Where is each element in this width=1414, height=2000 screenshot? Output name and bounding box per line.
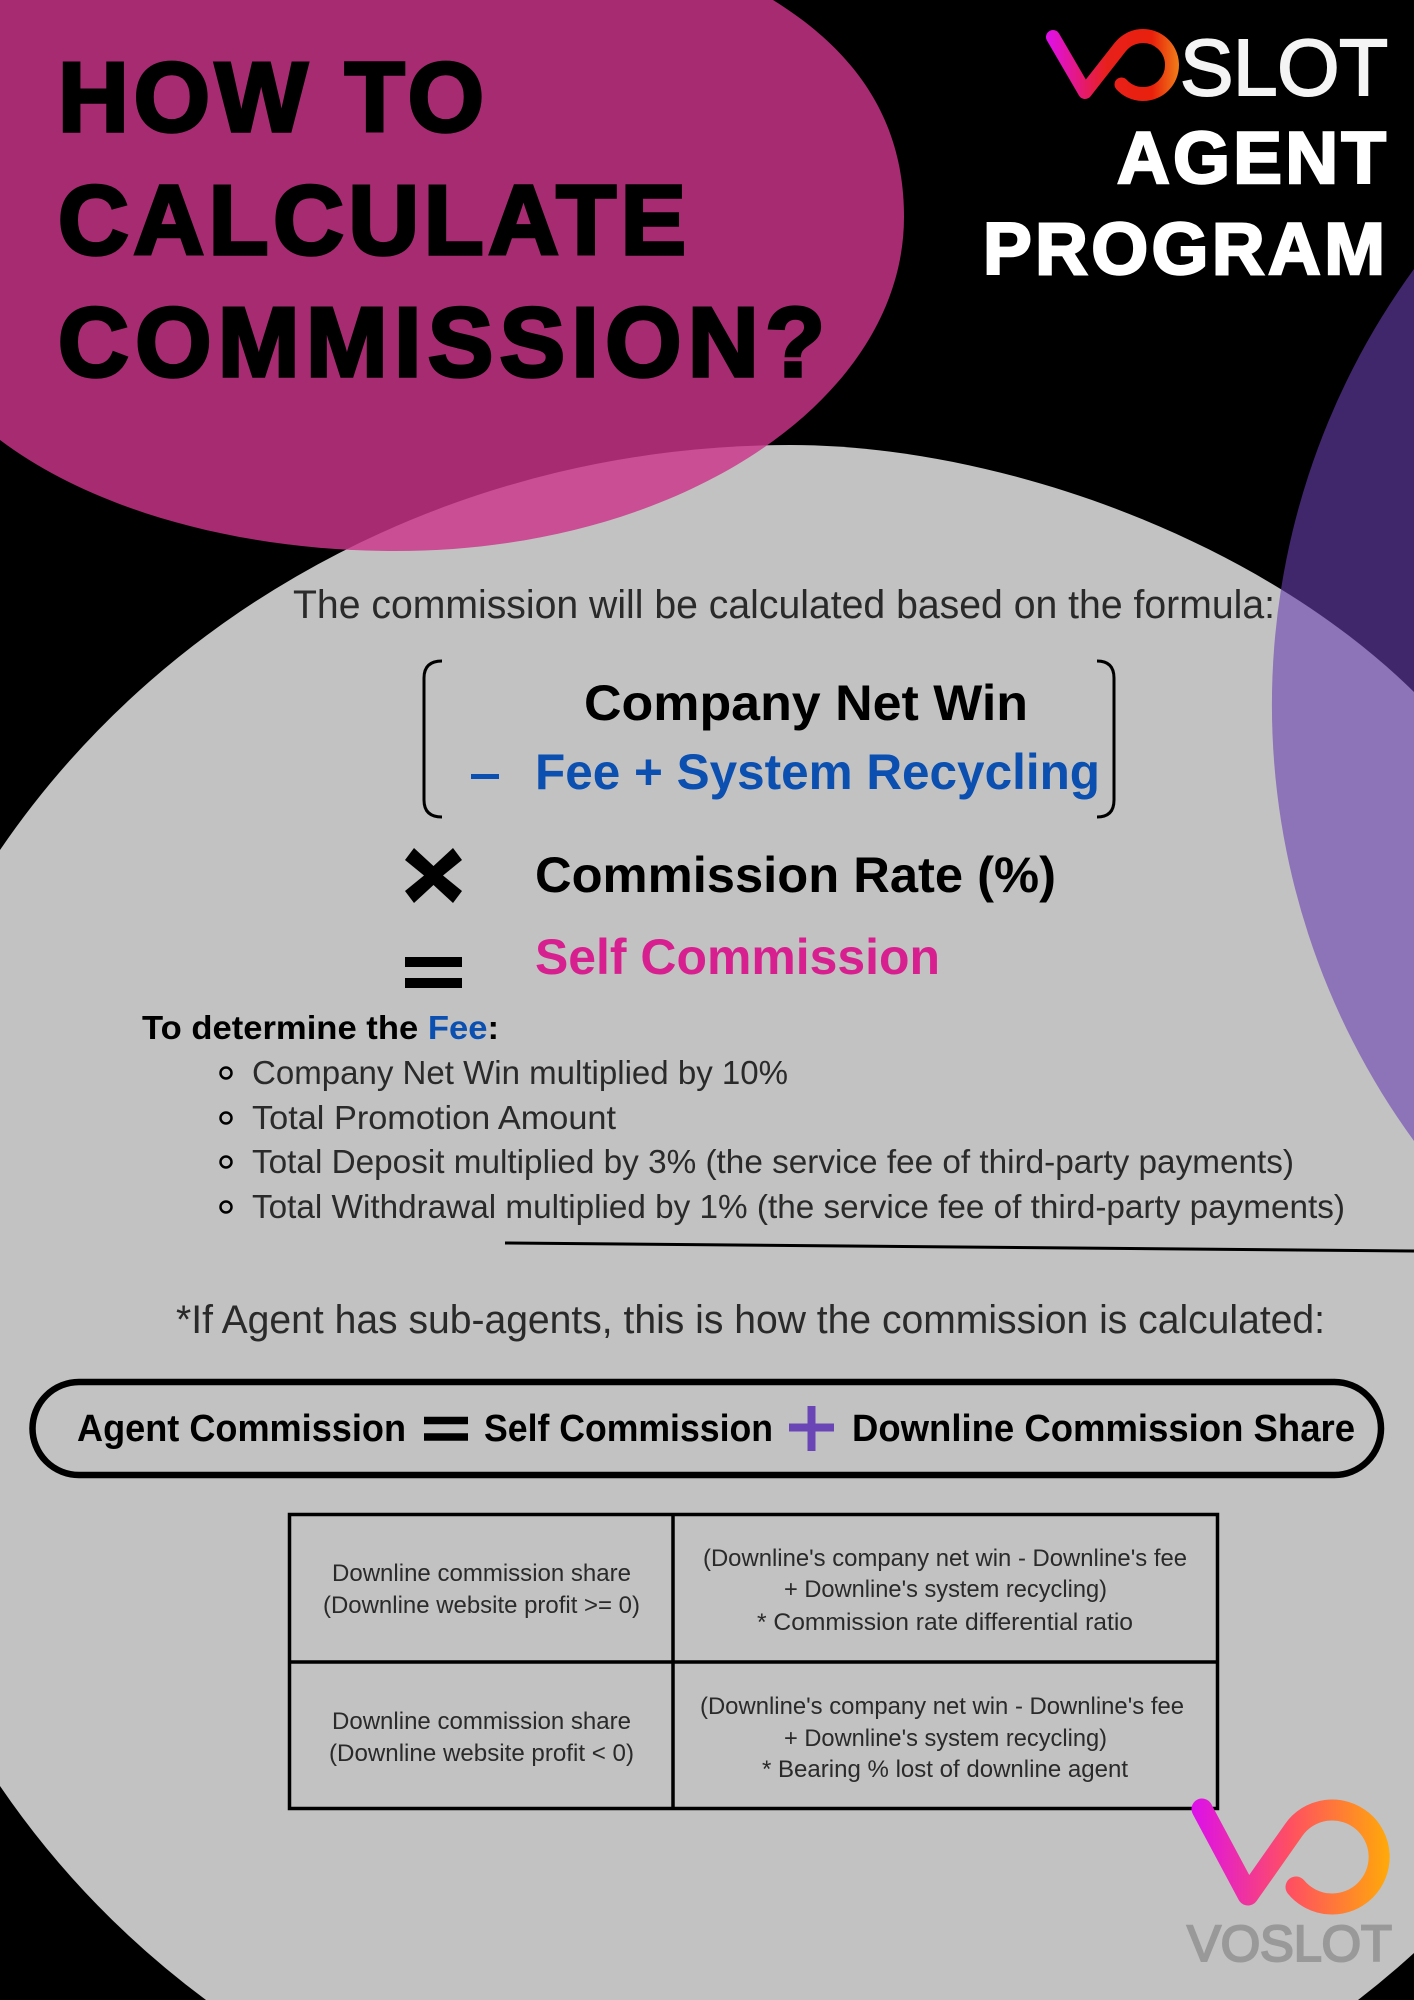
decoration: pink ellipse (0, 0, 904, 551)
table row 1: (Downline website profit >= 0) (323, 1592, 640, 1619)
table row 2: * Bearing % lost of downline agent (762, 1756, 1128, 1783)
table row 2 (329, 1693, 1184, 1783)
formula (405, 661, 1114, 985)
fee list (220, 1054, 1345, 1225)
left bracket (424, 661, 442, 817)
downline table (289, 1514, 1218, 1809)
intro text: The commission will be calculated based on the formula: (293, 583, 1275, 627)
heading: agent program (983, 118, 1386, 290)
agent commission formula pill: Agent Commission (77, 1408, 406, 1450)
multiply sign (405, 848, 462, 903)
table row 1: + Downline's system recycling) (784, 1576, 1107, 1603)
equals sign (405, 962, 462, 983)
table row 2: Downline commission share (332, 1708, 631, 1735)
sub-agent note: *If Agent has sub-agents, this is how the commission is calculated: (176, 1298, 1325, 1342)
heading: agent program: PROGRAM (983, 209, 1385, 290)
bottom logo (1187, 1809, 1392, 1972)
fee heading: To determine the Fee: (142, 1009, 499, 1046)
panel: grey ellipse (0, 445, 1414, 2000)
agent commission formula pill: Self Commission (484, 1408, 773, 1450)
table row 1: (Downline's company net win - Downline's fee (703, 1545, 1187, 1572)
title: COMMISSION? (58, 287, 825, 397)
bottom logo: VOSLOT (1187, 1915, 1392, 1972)
fee list: Total Promotion Amount (252, 1099, 616, 1136)
table row 1: * Commission rate differential ratio (757, 1609, 1133, 1636)
company net win: Company Net Win (584, 675, 1028, 731)
table row 2: (Downline's company net win - Downline's fee (700, 1693, 1184, 1720)
self commission: Self Commission (535, 929, 940, 985)
heading: agent program: AGENT (1117, 118, 1386, 199)
agent commission formula pill (32, 1382, 1381, 1475)
table row 1: Downline commission share (332, 1560, 631, 1587)
title: CALCULATE (58, 165, 686, 275)
decoration: purple circle (1272, 269, 1414, 1141)
fee and system recycling: Fee + System Recycling (535, 744, 1100, 800)
table row 2: + Downline's system recycling) (784, 1725, 1107, 1752)
top logo: SLOT (1180, 23, 1388, 112)
title (58, 42, 825, 397)
fee list: Company Net Win multiplied by 10% (252, 1054, 788, 1091)
agent commission formula pill: Downline Commission Share (852, 1408, 1355, 1450)
minus sign (471, 774, 499, 779)
table row 2: (Downline website profit < 0) (329, 1740, 634, 1767)
fee list: Total Deposit multiplied by 3% (the service fee of third-party payments) (252, 1143, 1294, 1180)
fee list: Total Withdrawal multiplied by 1% (the service fee of third-party payments) (252, 1188, 1345, 1225)
table row 1 (323, 1545, 1187, 1636)
title: HOW TO (58, 42, 484, 152)
right bracket (1097, 661, 1114, 817)
commission rate: Commission Rate (%) (535, 847, 1056, 903)
top logo (1053, 23, 1388, 112)
